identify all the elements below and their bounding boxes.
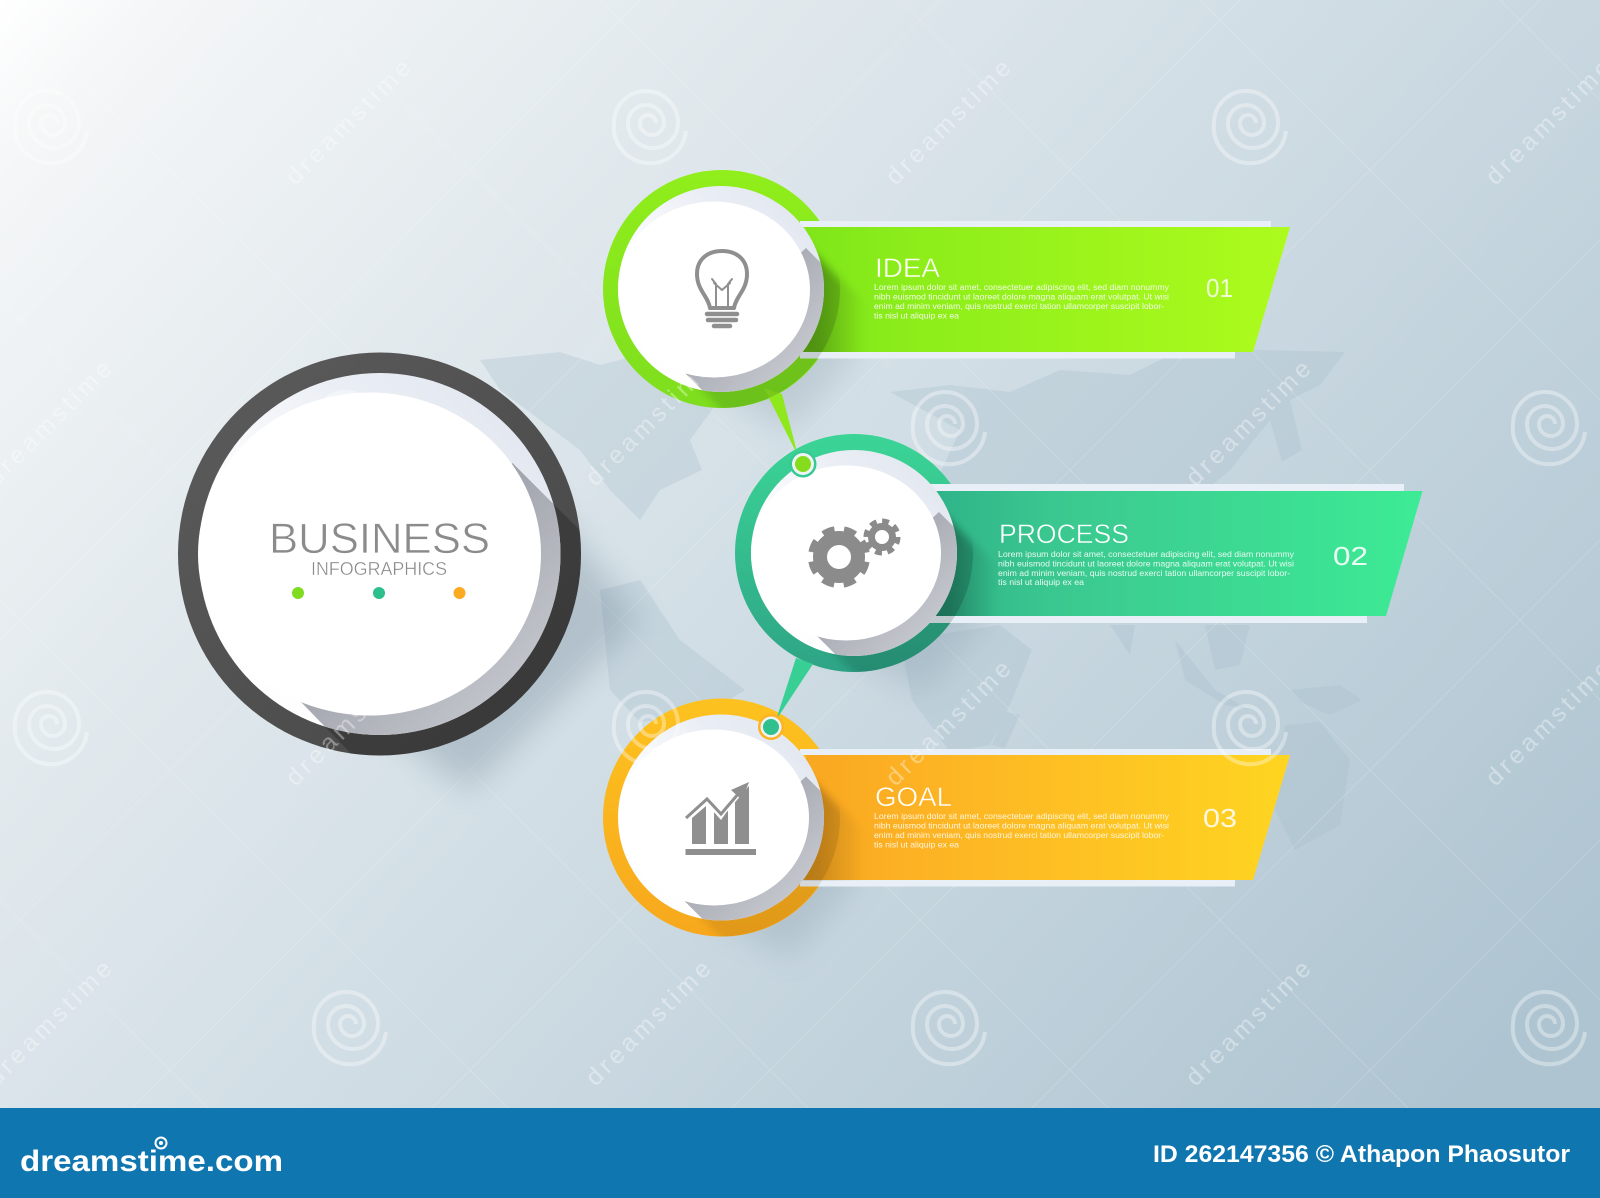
ring shadow (326, 505, 581, 756)
banner (806, 755, 1290, 880)
white face (751, 466, 941, 640)
banner (936, 491, 1422, 616)
icon: gears (810, 522, 897, 586)
footer logo: dreamstime.com (20, 1145, 283, 1178)
small gear (867, 522, 897, 552)
cast shadow on ring (700, 790, 840, 936)
cast shadow on banner (802, 778, 856, 880)
continent: north america (480, 352, 712, 520)
body text: Lorem ipsum dolor sit amet, consectetuer adipiscing elit, sed diam nonummy (874, 282, 1170, 292)
watermark text: dreamstime (280, 655, 417, 792)
body text: tis nisl ut aliquip ex ea (998, 577, 1084, 587)
cast shadow on banner (802, 248, 859, 352)
number: 03: 03 (1203, 803, 1237, 833)
panel: goal (603, 658, 1290, 936)
disc (751, 450, 990, 672)
pale disc (198, 373, 560, 735)
ring (603, 170, 841, 408)
watermark text: dreamstime (580, 355, 717, 492)
body text: nibh euismod tincidunt ut laoreet dolore magna aliquam erat volutpat. Ut wisi (998, 558, 1294, 568)
icon: light bulb (697, 251, 747, 326)
pale disc (618, 186, 824, 392)
body text (874, 811, 1170, 850)
watermark text: dreamstime (880, 655, 1017, 792)
outer dark ring (178, 352, 581, 756)
connector pointer (776, 658, 813, 720)
disc (618, 714, 856, 936)
connector pointer (764, 388, 798, 456)
main circle (178, 352, 581, 756)
disc (618, 186, 859, 408)
heading: process: PROCESS (999, 519, 1129, 549)
pale disc (751, 450, 957, 656)
panel: idea (603, 170, 1290, 450)
heading: idea: IDEA (875, 253, 940, 283)
ring (735, 434, 973, 672)
body text: tis nisl ut aliquip ex ea (874, 840, 959, 850)
white face (619, 730, 809, 906)
connector dot: process to goal (758, 714, 784, 740)
body text: nibh euismod tincidunt ut laoreet dolore magna aliquam erat volutpat. Ut wisi (874, 820, 1169, 830)
base line (686, 849, 756, 855)
body text: enim ad minim veniam, quis nostrud exerci tation ullamcorper suscipit lobor- (874, 301, 1164, 311)
legend dots (292, 587, 466, 599)
ring (603, 698, 841, 936)
soft shadow: step circles (700, 270, 992, 958)
watermark text: dreamstime (580, 955, 717, 1092)
watermark spirals (15, 91, 1585, 1064)
number: 02: 02 (1333, 541, 1368, 571)
footer credit: ID 262147356 © Athapon Phaosutor (1153, 1141, 1570, 1168)
continent: south america (600, 580, 745, 722)
icon: growth chart (686, 782, 756, 855)
continent: africa (900, 625, 1032, 752)
panel: process (735, 434, 1422, 672)
banner (806, 227, 1290, 352)
crescent (684, 776, 824, 920)
body text: nibh euismod tincidunt ut laoreet dolore magna aliquam erat volutpat. Ut wisi (874, 292, 1169, 302)
cast shadow on ring (698, 260, 840, 408)
connector dot: idea to process (790, 450, 816, 478)
heading: business: BUSINESS (269, 515, 490, 563)
footer bar (0, 1108, 1600, 1198)
body text: enim ad minim veniam, quis nostrud exerci tation ullamcorper suscipit lobor- (874, 830, 1164, 840)
body text: enim ad minim veniam, quis nostrud exerci tation ullamcorper suscipit lobor- (998, 568, 1290, 578)
continent: oceania (1270, 685, 1362, 850)
body text: tis nisl ut aliquip ex ea (874, 310, 959, 320)
watermark text: dreamstime (880, 54, 1017, 191)
body text: Lorem ipsum dolor sit amet, consectetuer adipiscing elit, sed diam nonummy (874, 811, 1170, 821)
white face (618, 202, 810, 378)
banner edge strips (800, 749, 1271, 886)
arrow (686, 786, 745, 818)
crescent shadow (301, 463, 560, 735)
cast shadow on banner (936, 514, 990, 616)
continent: south east asia (1110, 625, 1250, 710)
watermark text: dreamstime (1180, 355, 1317, 492)
world map (480, 350, 1362, 850)
number: 01: 01 (1206, 273, 1233, 303)
heading: goal: GOAL (875, 782, 952, 812)
main title (269, 515, 490, 599)
subheading: infographics: INFOGRAPHICS (311, 558, 447, 579)
crescent (817, 512, 957, 656)
watermark text: dreamstime (1180, 955, 1317, 1092)
body text (998, 549, 1295, 587)
white face (198, 392, 541, 716)
continent: eurasia (890, 350, 1345, 495)
body text (874, 282, 1170, 320)
banner edge strips (930, 484, 1404, 623)
soft shadow: main circle (330, 470, 640, 790)
cast shadow on ring (833, 524, 973, 672)
bars (692, 806, 706, 844)
pale disc (618, 714, 824, 920)
watermark text: dreamstime (280, 54, 417, 191)
big gear (810, 528, 868, 586)
banner edge strips (800, 221, 1271, 358)
crescent (685, 248, 824, 392)
body text: Lorem ipsum dolor sit amet, consectetuer adipiscing elit, sed diam nonummy (998, 549, 1295, 559)
